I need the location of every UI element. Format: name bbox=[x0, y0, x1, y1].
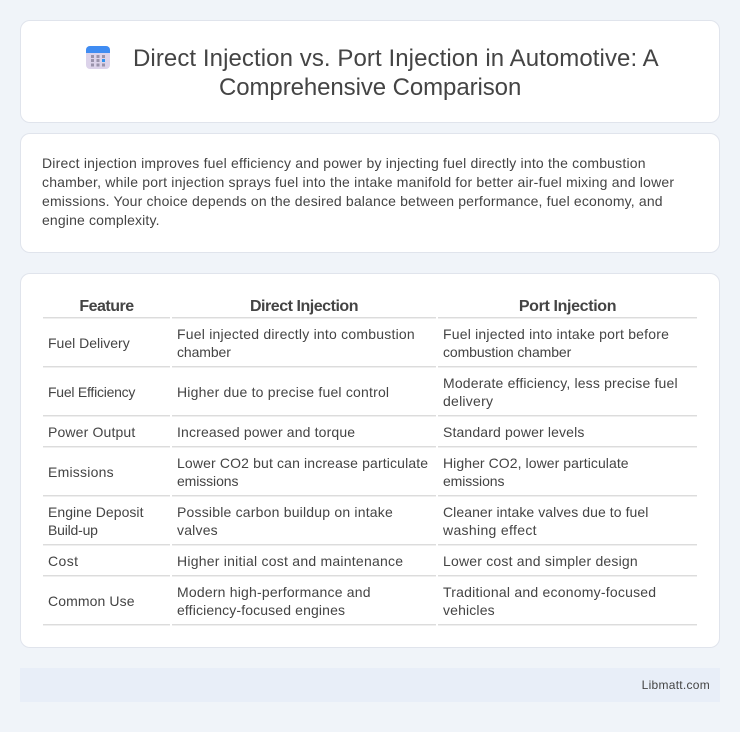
row: Emissions: Emissions bbox=[48, 464, 114, 480]
row: Engine Deposit Build-up: Build-up bbox=[48, 522, 98, 538]
row: Cost bbox=[48, 553, 638, 569]
row: Common Use: Common Use bbox=[48, 593, 135, 609]
icon: calendar bbox=[86, 46, 110, 69]
row: Engine Deposit Build-up: washing effect bbox=[443, 522, 537, 538]
row: Common Use: Modern high-performance and bbox=[177, 584, 371, 600]
row: Fuel Delivery: Fuel injected into intake port before bbox=[443, 326, 669, 342]
row: Fuel Delivery: Fuel Delivery bbox=[48, 335, 130, 351]
row: Fuel Efficiency: delivery bbox=[443, 393, 493, 409]
row: Common Use bbox=[48, 584, 656, 618]
row: Common Use: efficiency-focused engines bbox=[177, 602, 345, 618]
row: Emissions: emissions bbox=[177, 473, 238, 489]
row: Power Output: Increased power and torque bbox=[177, 424, 355, 440]
row: Fuel Efficiency bbox=[48, 375, 678, 409]
summary text: engine complexity. bbox=[42, 212, 160, 228]
row: Engine Deposit Build-up: Possible carbon buildup on intake bbox=[177, 504, 393, 520]
title bbox=[133, 45, 659, 101]
row: Fuel Delivery: combustion chamber bbox=[443, 344, 571, 360]
row: Power Output bbox=[48, 424, 584, 440]
table header: Port Injection: Port Injection bbox=[519, 298, 616, 315]
footer credit: Libmatt.com bbox=[642, 678, 710, 692]
panel: summary card bbox=[20, 133, 720, 253]
summary text: chamber, while port injection sprays fuel into the intake manifold for better air-fuel mixing and lower bbox=[42, 174, 674, 190]
summary text: emissions. Your choice depends on the desired balance between performance, fuel economy, and bbox=[42, 193, 663, 209]
row: Emissions: emissions bbox=[443, 473, 504, 489]
table header: Direct Injection: Direct Injection bbox=[250, 298, 358, 315]
row: Cost: Higher initial cost and maintenance bbox=[177, 553, 403, 569]
row: Engine Deposit Build-up: Cleaner intake valves due to fuel bbox=[443, 504, 648, 520]
row: Fuel Efficiency: Higher due to precise fuel control bbox=[177, 384, 389, 400]
row: Fuel Delivery: chamber bbox=[177, 344, 231, 360]
panel: comparison table card bbox=[20, 273, 720, 648]
row: Emissions bbox=[48, 455, 629, 489]
row: Cost: Cost bbox=[48, 553, 78, 569]
row: Cost: Lower cost and simpler design bbox=[443, 553, 638, 569]
row: Fuel Efficiency: Moderate efficiency, less precise fuel bbox=[443, 375, 678, 391]
row: Engine Deposit Build-up: valves bbox=[177, 522, 218, 538]
summary text bbox=[42, 155, 674, 228]
title: Comprehensive Comparison bbox=[219, 74, 521, 101]
row: Emissions: Higher CO2, lower particulate bbox=[443, 455, 629, 471]
title: Direct Injection vs. Port Injection in Automotive: A bbox=[133, 45, 659, 72]
footer bar bbox=[20, 668, 720, 702]
row: Engine Deposit Build-up bbox=[48, 504, 648, 538]
row: Engine Deposit Build-up: Engine Deposit bbox=[48, 504, 144, 520]
row: Fuel Delivery bbox=[48, 326, 669, 360]
table header: Feature: Feature bbox=[79, 298, 134, 315]
row: Fuel Efficiency: Fuel Efficiency bbox=[48, 384, 135, 400]
summary text: Direct injection improves fuel efficiency and power by injecting fuel directly into the combustion bbox=[42, 155, 646, 171]
panel: title card bbox=[20, 20, 720, 123]
row: Power Output: Power Output bbox=[48, 424, 135, 440]
row: Power Output: Standard power levels bbox=[443, 424, 584, 440]
row: Fuel Delivery: Fuel injected directly into combustion bbox=[177, 326, 415, 342]
row: Common Use: vehicles bbox=[443, 602, 495, 618]
row: Common Use: Traditional and economy-focused bbox=[443, 584, 656, 600]
row: Emissions: Lower CO2 but can increase particulate bbox=[177, 455, 428, 471]
